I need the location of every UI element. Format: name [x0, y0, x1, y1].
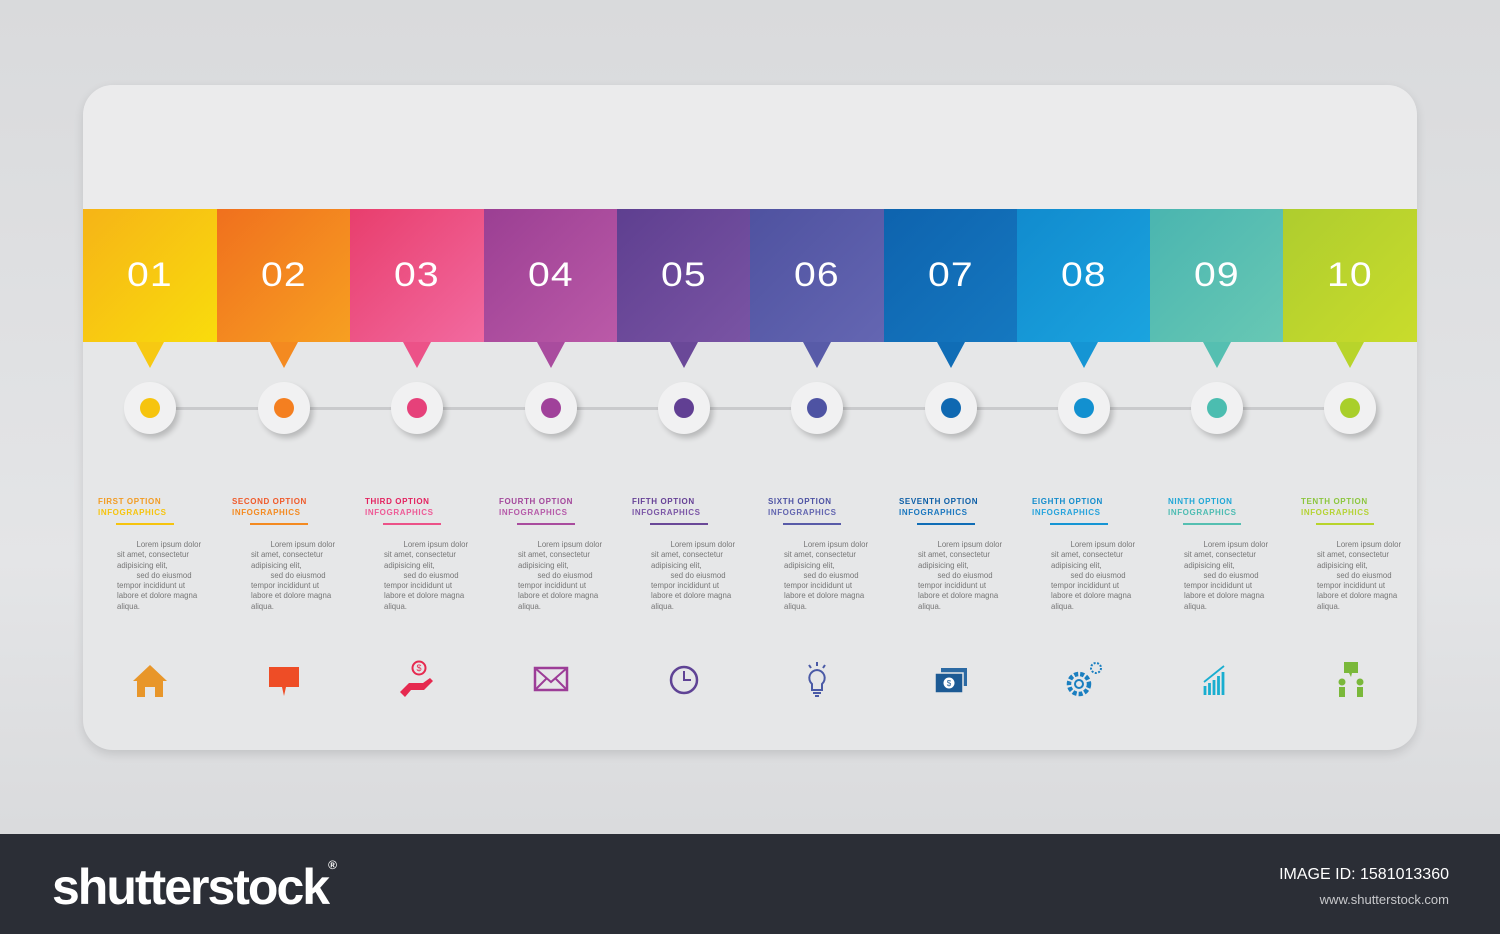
text 07 — [918, 540, 1002, 611]
number bar 05: 05 — [661, 256, 707, 294]
text 09: sit amet, consectetur — [1184, 550, 1256, 559]
text 06: tempor incididunt ut — [784, 581, 852, 590]
text 06: labore et dolore magna — [784, 591, 864, 600]
text 05: labore et dolore magna — [651, 591, 731, 600]
number bar 09 — [1150, 209, 1284, 342]
title 01 — [98, 497, 167, 517]
marker 06 — [791, 382, 843, 434]
title 08 — [1032, 497, 1103, 517]
title 08: EIGHTH OPTION — [1032, 497, 1103, 506]
marker 08 — [1058, 382, 1110, 434]
pointer 04 — [537, 342, 565, 368]
text 03: sed do eiusmod — [403, 571, 459, 580]
title 05: FIFTH OPTION — [632, 497, 695, 506]
number bar 01: 01 — [127, 256, 173, 294]
text 06 — [784, 540, 868, 611]
text 10: sed do eiusmod — [1336, 571, 1392, 580]
column 10 — [1283, 209, 1417, 697]
text 04 — [518, 540, 602, 611]
title 10 — [1301, 497, 1370, 517]
number bar 03 — [350, 209, 484, 342]
number bar 08 — [1017, 209, 1151, 342]
pointer 06 — [803, 342, 831, 368]
column 01 — [83, 209, 217, 697]
text 09: adipisicing elit, — [1184, 561, 1235, 570]
title 05 — [632, 497, 701, 517]
icon: clock — [670, 666, 698, 694]
text 04: sit amet, consectetur — [518, 550, 590, 559]
text 06: Lorem ipsum dolor — [803, 540, 868, 549]
text 08: sed do eiusmod — [1070, 571, 1126, 580]
text 04: adipisicing elit, — [518, 561, 569, 570]
text 02: tempor incididunt ut — [251, 581, 319, 590]
title 10: TENTH OPTION — [1301, 497, 1368, 506]
title 03 — [365, 497, 434, 517]
text 08: adipisicing elit, — [1051, 561, 1102, 570]
title 09: INFOGRAPHICS — [1168, 508, 1237, 517]
marker 10 — [1324, 382, 1376, 434]
text 01 — [117, 540, 201, 611]
text 09: Lorem ipsum dolor — [1203, 540, 1268, 549]
title 06: SIXTH OPTION — [768, 497, 832, 506]
number bar 09: 09 — [1194, 256, 1240, 294]
title 06: INFOGRAPHICS — [768, 508, 837, 517]
number bar 08: 08 — [1061, 256, 1107, 294]
text 06: adipisicing elit, — [784, 561, 835, 570]
text 10: labore et dolore magna — [1317, 591, 1397, 600]
text 01: tempor incididunt ut — [117, 581, 185, 590]
text 10: sit amet, consectetur — [1317, 550, 1389, 559]
text 01: adipisicing elit, — [117, 561, 168, 570]
text 09: tempor incididunt ut — [1184, 581, 1252, 590]
number bar 03: 03 — [394, 256, 440, 294]
number bar 10 — [1283, 209, 1417, 342]
text 02: sit amet, consectetur — [251, 550, 323, 559]
footer logo: shutterstock® — [52, 858, 335, 915]
text 03 — [384, 540, 468, 611]
text 09: labore et dolore magna — [1184, 591, 1264, 600]
title 03: INFOGRAPHICS — [365, 508, 434, 517]
column 09 — [1150, 209, 1283, 695]
column 04 — [484, 209, 617, 692]
pointer 01 — [136, 342, 164, 368]
text 03: tempor incididunt ut — [384, 581, 452, 590]
text 05: adipisicing elit, — [651, 561, 702, 570]
number bar 07: 07 — [928, 256, 974, 294]
text 03: adipisicing elit, — [384, 561, 435, 570]
icon: hand with coin: $ — [416, 663, 422, 673]
text 02: labore et dolore magna — [251, 591, 331, 600]
column 07 — [884, 209, 1017, 692]
marker 01 — [124, 382, 176, 434]
icon: people meeting — [1338, 662, 1364, 697]
text 05: tempor incididunt ut — [651, 581, 719, 590]
title 04: INFOGRAPHICS — [499, 508, 568, 517]
text 02: aliqua. — [251, 602, 274, 611]
column 02 — [217, 209, 350, 696]
text 05: sed do eiusmod — [670, 571, 726, 580]
text 04: Lorem ipsum dolor — [537, 540, 602, 549]
title 06 — [768, 497, 837, 517]
title 09 — [1168, 497, 1237, 517]
text 03: sit amet, consectetur — [384, 550, 456, 559]
number bar 02 — [217, 209, 351, 342]
text 07: adipisicing elit, — [918, 561, 969, 570]
icon: hand with coin — [400, 660, 433, 697]
text 05: Lorem ipsum dolor — [670, 540, 735, 549]
marker 04 — [525, 382, 577, 434]
title 01: INFOGRAPHICS — [98, 508, 167, 517]
text 06: sed do eiusmod — [803, 571, 859, 580]
text 09: aliqua. — [1184, 602, 1207, 611]
text 10 — [1317, 540, 1401, 611]
column 03 — [350, 209, 484, 697]
title 01: FIRST OPTION — [98, 497, 161, 506]
icon: bar chart — [1204, 665, 1224, 695]
title 08: INFOGRAPHICS — [1032, 508, 1101, 517]
icon: gears — [1066, 662, 1102, 696]
number bar 06: 06 — [794, 256, 840, 294]
text 02: Lorem ipsum dolor — [270, 540, 335, 549]
text 01: labore et dolore magna — [117, 591, 197, 600]
text 08: tempor incididunt ut — [1051, 581, 1119, 590]
marker 07 — [925, 382, 977, 434]
number bar 01 — [83, 209, 217, 342]
title 03: THIRD OPTION — [365, 497, 430, 506]
text 07: tempor incididunt ut — [918, 581, 986, 590]
text 10: tempor incididunt ut — [1317, 581, 1385, 590]
text 08 — [1051, 540, 1135, 611]
marker 09 — [1191, 382, 1243, 434]
text 09: sed do eiusmod — [1203, 571, 1259, 580]
text 06: sit amet, consectetur — [784, 550, 856, 559]
text 04: tempor incididunt ut — [518, 581, 586, 590]
text 07: labore et dolore magna — [918, 591, 998, 600]
text 07: sed do eiusmod — [937, 571, 993, 580]
image id: IMAGE ID: 1581013360 — [1279, 866, 1449, 883]
image id: www.shutterstock.com — [1320, 892, 1449, 907]
number bar 02: 02 — [261, 256, 307, 294]
pointer 09 — [1203, 342, 1231, 368]
number bar 06 — [750, 209, 884, 342]
icon: envelope — [534, 666, 568, 692]
text 08: aliqua. — [1051, 602, 1074, 611]
text 08: Lorem ipsum dolor — [1070, 540, 1135, 549]
text 03: labore et dolore magna — [384, 591, 464, 600]
pointer 08 — [1070, 342, 1098, 368]
marker 03 — [391, 382, 443, 434]
text 01: sit amet, consectetur — [117, 550, 189, 559]
text 04: aliqua. — [518, 602, 541, 611]
text 05: aliqua. — [651, 602, 674, 611]
pointer 02 — [270, 342, 298, 368]
column 06 — [750, 209, 884, 697]
marker 02 — [258, 382, 310, 434]
text 07: aliqua. — [918, 602, 941, 611]
number bar 05 — [617, 209, 751, 342]
text 08: sit amet, consectetur — [1051, 550, 1123, 559]
title 07 — [899, 497, 978, 517]
text 01: aliqua. — [117, 602, 140, 611]
text 03: Lorem ipsum dolor — [403, 540, 468, 549]
title 02 — [232, 497, 307, 517]
icon: money: $ — [947, 679, 952, 688]
text 06: aliqua. — [784, 602, 807, 611]
marker 05 — [658, 382, 710, 434]
icon: money — [936, 668, 967, 692]
title 09: NINTH OPTION — [1168, 497, 1233, 506]
text 07: sit amet, consectetur — [918, 550, 990, 559]
number bar 10: 10 — [1327, 256, 1373, 294]
title 05: INFOGRAPHICS — [632, 508, 701, 517]
title 07: SEVENTH OPTION — [899, 497, 978, 506]
text 05 — [651, 540, 735, 611]
title 02: INFOGRAPHICS — [232, 508, 301, 517]
title 02: SECOND OPTION — [232, 497, 307, 506]
text 01: sed do eiusmod — [136, 571, 192, 580]
number bar 07 — [884, 209, 1018, 342]
icon: light bulb — [808, 662, 826, 697]
image id — [1279, 862, 1449, 912]
footer bar — [0, 834, 1500, 934]
text 03: aliqua. — [384, 602, 407, 611]
title 04: FOURTH OPTION — [499, 497, 573, 506]
pointer 05 — [670, 342, 698, 368]
text 04: sed do eiusmod — [537, 571, 593, 580]
column 08 — [1017, 209, 1150, 696]
text 10: aliqua. — [1317, 602, 1340, 611]
column 05 — [617, 209, 750, 694]
title 07: INFOGRAPHICS — [899, 508, 968, 517]
text 04: labore et dolore magna — [518, 591, 598, 600]
text 07: Lorem ipsum dolor — [937, 540, 1002, 549]
title 04 — [499, 497, 573, 517]
number bar 04: 04 — [528, 256, 574, 294]
title 10: INFOGRAPHICS — [1301, 508, 1370, 517]
text 05: sit amet, consectetur — [651, 550, 723, 559]
text 08: labore et dolore magna — [1051, 591, 1131, 600]
text 10: Lorem ipsum dolor — [1336, 540, 1401, 549]
pointer 10 — [1336, 342, 1364, 368]
text 02 — [251, 540, 335, 611]
icon: home — [133, 665, 167, 697]
pointer 03 — [403, 342, 431, 368]
text 09 — [1184, 540, 1268, 611]
icon: speech bubble — [269, 667, 299, 696]
pointer 07 — [937, 342, 965, 368]
panel: timeline card — [83, 85, 1417, 750]
text 01: Lorem ipsum dolor — [136, 540, 201, 549]
text 02: adipisicing elit, — [251, 561, 302, 570]
text 10: adipisicing elit, — [1317, 561, 1368, 570]
text 02: sed do eiusmod — [270, 571, 326, 580]
number bar 04 — [484, 209, 618, 342]
